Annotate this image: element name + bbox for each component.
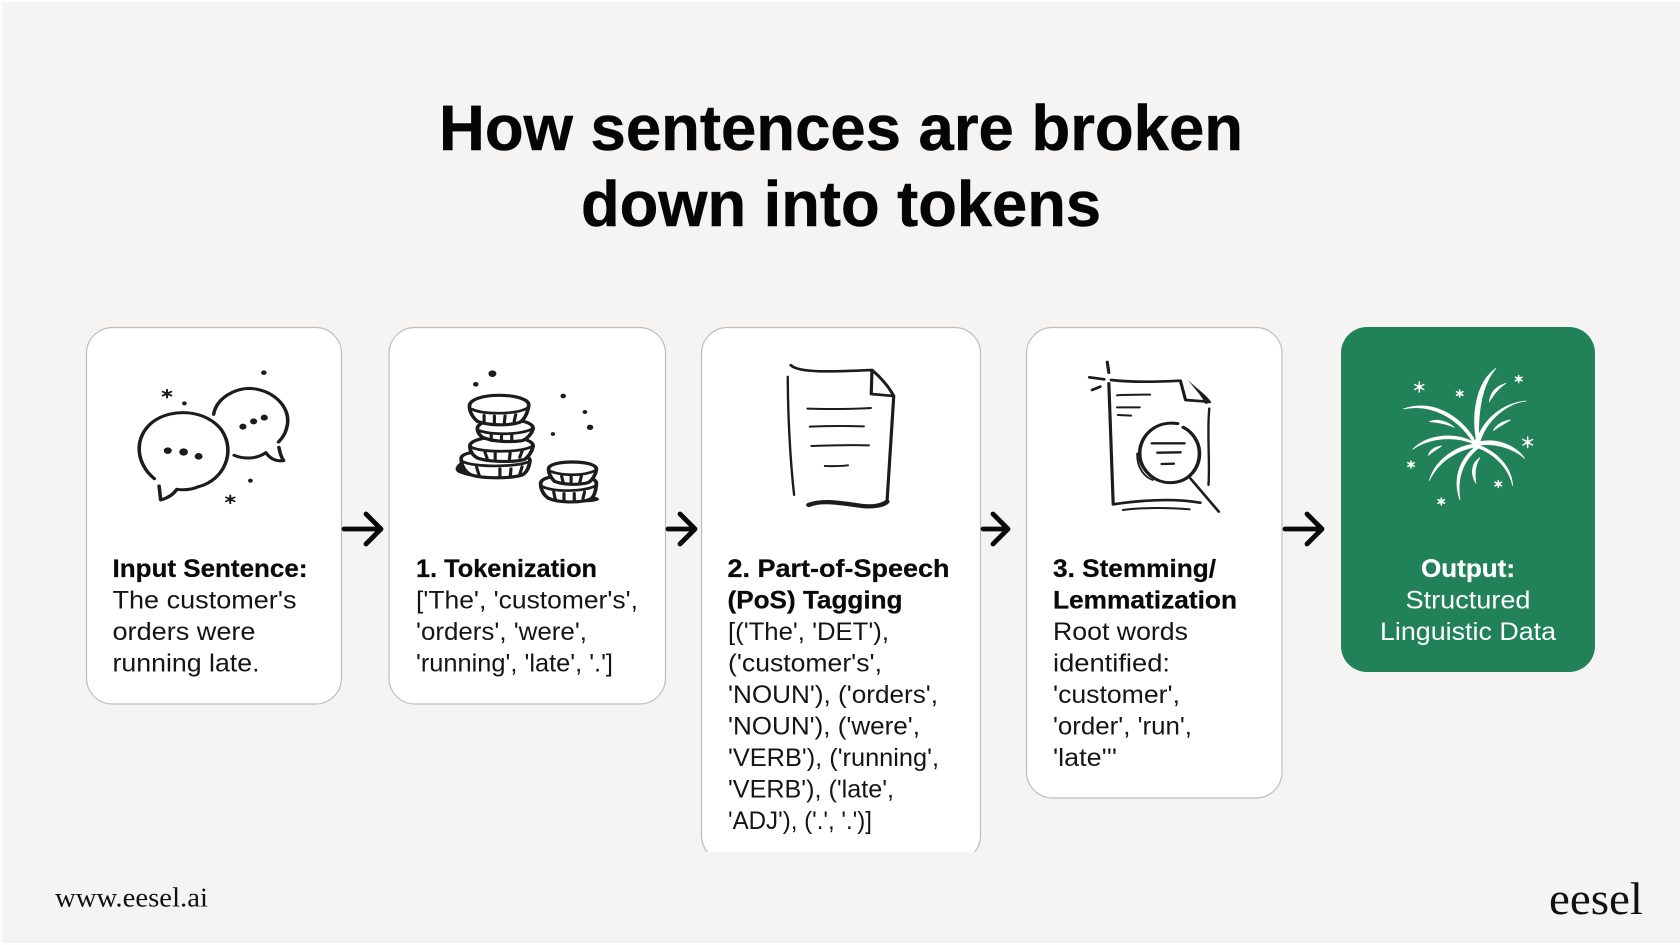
text: output: Structured [1406,586,1530,614]
text: output: Output: [1421,555,1515,583]
footer: eesel logo: eesel [1549,873,1643,924]
text: output: Linguistic Data [1380,618,1557,646]
text: stemming and lemmatization: Root words [1053,618,1188,646]
text: output [1380,555,1557,646]
text: input sentence: Input Sentence: [112,555,308,583]
text: input sentence: running late. [112,650,260,678]
text: tokenization [416,555,638,678]
text: input sentence: orders were [112,618,256,646]
panel: tokenization [389,328,666,704]
text: stemming and lemmatization [1053,555,1237,772]
arrow: tokenization to tagging [668,514,695,544]
footer: website url: www.eesel.ai [55,882,208,912]
arrow: input to tokenization [344,514,381,544]
text: input sentence [112,555,308,678]
panel: output [1341,327,1595,672]
title: How sentences are broken [439,92,1243,164]
text: part-of-speech tagging: 'ADJ'), ('.', '.')] [728,807,872,835]
text: stemming and lemmatization: Lemmatization [1053,586,1237,614]
text: tokenization: 1. Tokenization [416,555,597,583]
text: part-of-speech tagging: 'NOUN'), ('orders', [728,681,938,709]
panel: stemming and lemmatization [1026,328,1282,798]
text: stemming and lemmatization: 'order', 'run', [1053,712,1192,740]
icon: fireworks [1403,368,1532,505]
text: stemming and lemmatization: identified: [1053,650,1170,678]
icon: speech bubbles [139,370,288,503]
text: part-of-speech tagging [728,555,950,835]
title: down into tokens [581,168,1101,240]
arrow: stemming to output [1285,514,1322,544]
text: stemming and lemmatization: 3. Stemming/ [1053,555,1216,583]
text: stemming and lemmatization: 'customer', [1053,681,1180,709]
text: part-of-speech tagging: 'VERB'), ('running', [728,744,939,772]
text: tokenization: 'orders', 'were', [416,618,587,646]
text: stemming and lemmatization: 'late''' [1053,744,1117,772]
text: part-of-speech tagging: [('The', 'DET'), [728,618,889,646]
text: part-of-speech tagging: 'NOUN'), ('were', [728,712,920,740]
text: part-of-speech tagging: ('customer's', [728,650,882,678]
icon: coin stacks [456,370,599,502]
text: tokenization: 'running', 'late', '.'] [416,650,613,678]
panel: part-of-speech tagging [702,328,980,862]
text: part-of-speech tagging: (PoS) Tagging [728,586,902,614]
panel: input sentence [86,328,342,704]
text: tokenization: ['The', 'customer's', [416,586,638,614]
icon: document [788,365,894,506]
text: input sentence: The customer's [112,586,296,614]
title [439,92,1243,240]
arrow: tagging to stemming [983,514,1008,544]
icon: document with magnifier [1089,362,1219,512]
text: part-of-speech tagging: 'VERB'), ('late', [728,776,894,804]
text: part-of-speech tagging: 2. Part-of-Speech [728,555,950,583]
